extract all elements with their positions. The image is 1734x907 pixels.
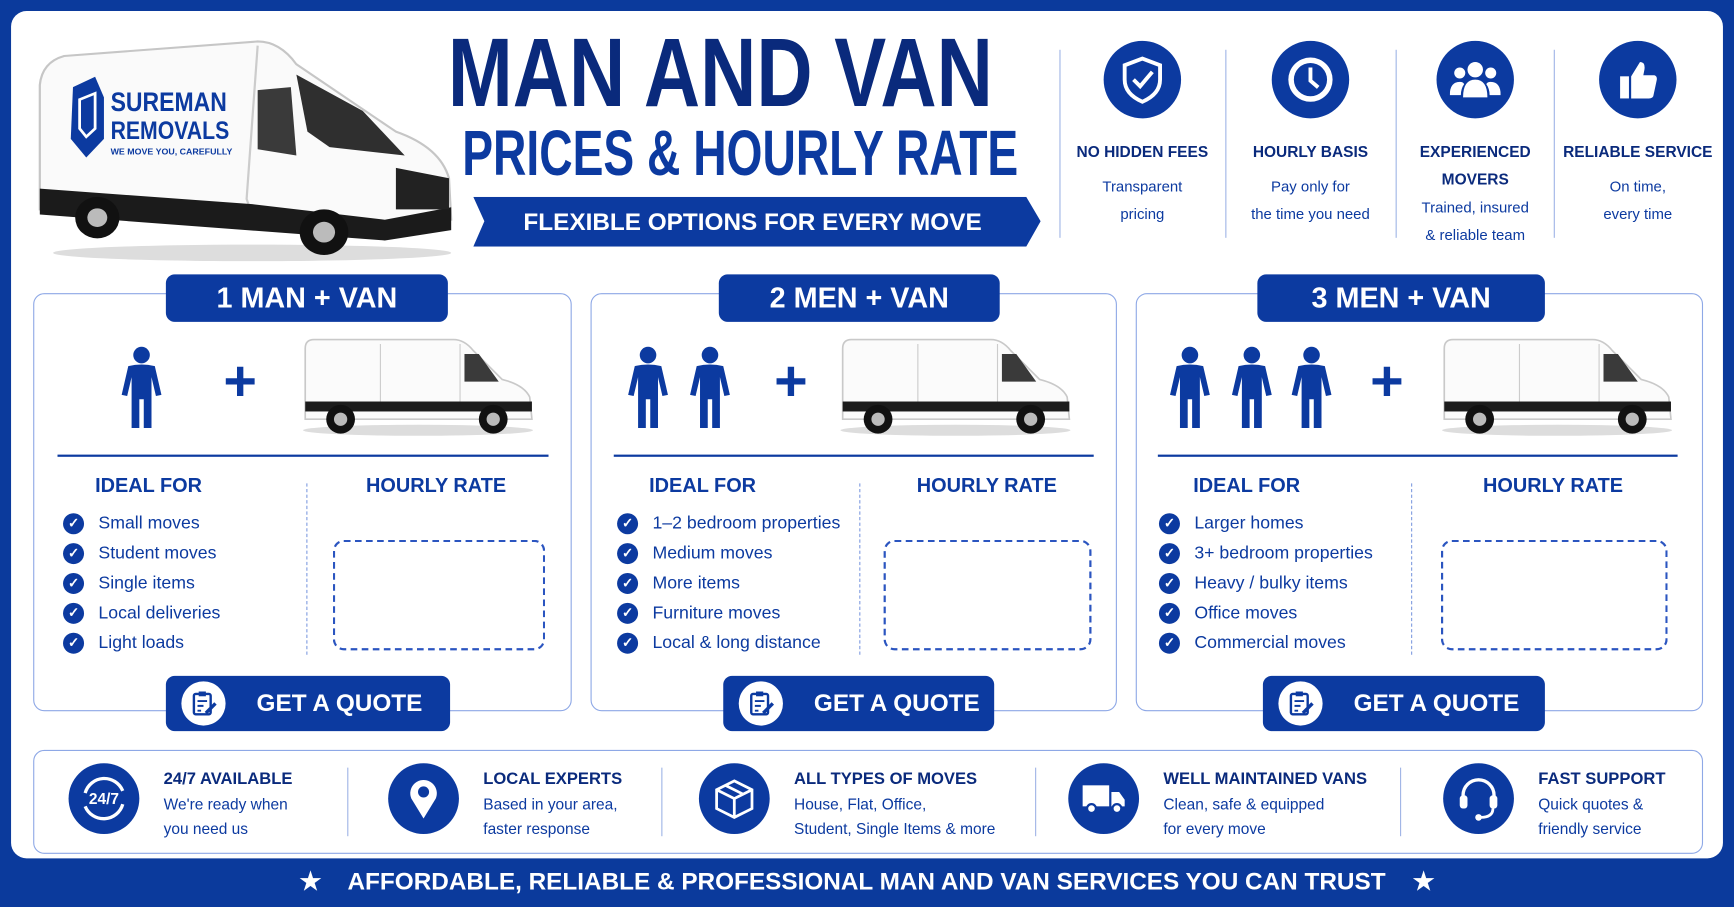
feature: no hidden fees: pricing (1120, 206, 1164, 222)
text: Larger homes (1194, 514, 1304, 533)
text: Small moves (98, 514, 200, 533)
hourly rate 1: HOURLY RATE (366, 475, 506, 497)
tab: 2 men + van (719, 274, 1000, 322)
benefit: local experts (388, 763, 622, 838)
ideal for 1: IDEAL FOR (95, 475, 202, 497)
feature: no hidden fees: Transparent (1102, 178, 1182, 195)
hourly rate 3: HOURLY RATE (1483, 475, 1623, 497)
feature: no hidden fees (1077, 40, 1208, 222)
icons row 1 (122, 338, 533, 436)
benefit: fast support (1443, 763, 1666, 838)
feature: experienced movers: & reliable team (1425, 227, 1525, 243)
tab: 3 men + van: 3 MEN + VAN (1312, 281, 1491, 314)
quote button 3: GET A QUOTE (1354, 689, 1519, 717)
text: Student, Single Items & more (794, 820, 995, 837)
text: Furniture moves (652, 604, 780, 623)
subtitle: PRICES & HOURLY RATE (462, 117, 1018, 189)
tab: 1 man + van (166, 274, 448, 322)
bottom benefits strip (33, 750, 1703, 854)
text: Local deliveries (98, 604, 220, 623)
benefit: 24/7 (68, 763, 292, 838)
text: Based in your area, (483, 795, 618, 813)
text: for every move (1163, 820, 1266, 837)
text: ALL TYPES OF MOVES (794, 770, 977, 789)
feature: hourly basis (1251, 40, 1370, 222)
quote button 1: GET A QUOTE (257, 689, 422, 717)
hero van with logo: SUREMAN (111, 87, 227, 117)
text: LOCAL EXPERTS (483, 770, 622, 789)
icons row 3: + (1370, 350, 1404, 414)
text: Quick quotes & (1538, 795, 1643, 813)
feature: hourly basis: HOURLY BASIS (1253, 143, 1368, 160)
text: Heavy / bulky items (1194, 574, 1348, 593)
text: We're ready when (164, 795, 288, 813)
ideal for 3: IDEAL FOR (1193, 475, 1300, 497)
hero van with logo: REMOVALS (111, 116, 229, 144)
feature: reliable service: every time (1603, 206, 1672, 222)
panel 3 (1136, 293, 1703, 711)
text: Student moves (98, 544, 216, 563)
text: House, Flat, Office, (794, 795, 926, 813)
tab: 3 men + van (1257, 274, 1545, 322)
text: Single items (98, 574, 195, 593)
footer tagline: ★ AFFORDABLE, RELIABLE & PROFESSIONAL MAN AND VAN SERVICES YOU CAN TRUST ★ (300, 867, 1434, 895)
text: you need us (164, 820, 248, 837)
icons row 2 (628, 338, 1070, 436)
feature: reliable service (1563, 40, 1712, 222)
panel 2 (591, 293, 1117, 711)
feature: hourly basis: the time you need (1251, 206, 1370, 222)
feature: experienced movers: MOVERS (1442, 170, 1509, 188)
text: 3+ bedroom properties (1194, 544, 1373, 563)
text: faster response (483, 820, 590, 837)
icons row 1: + (223, 350, 257, 414)
text: WELL MAINTAINED VANS (1163, 770, 1367, 789)
text: 24/7 (89, 791, 119, 808)
text: friendly service (1538, 820, 1642, 837)
text: Office moves (1194, 604, 1297, 623)
benefit: vans (1068, 763, 1367, 838)
quote button 2 (723, 676, 994, 731)
text: Medium moves (652, 544, 772, 563)
feature: experienced movers: Trained, insured (1422, 199, 1529, 216)
text: More items (652, 574, 740, 593)
title: MAN AND VAN (448, 18, 993, 127)
quote button 1 (166, 676, 450, 731)
feature: no hidden fees: NO HIDDEN FEES (1077, 143, 1208, 160)
text: Local & long distance (652, 634, 821, 653)
feature: reliable service: On time, (1610, 178, 1666, 195)
text: Commercial moves (1194, 634, 1346, 653)
panel 1 (33, 293, 572, 711)
quote button 3 (1263, 676, 1545, 731)
hero van with logo (38, 40, 452, 261)
ideal for 2: IDEAL FOR (649, 475, 756, 497)
tab: 1 man + van: 1 MAN + VAN (216, 281, 397, 314)
text: 24/7 AVAILABLE (164, 770, 292, 789)
text: 1–2 bedroom properties (652, 514, 840, 533)
hero van with logo: WE MOVE YOU, CAREFULLY (111, 147, 233, 156)
ribbon: FLEXIBLE OPTIONS FOR EVERY MOVE (523, 208, 982, 236)
feature: reliable service: RELIABLE SERVICE (1563, 143, 1712, 160)
hourly rate 2: HOURLY RATE (917, 475, 1057, 497)
icons row 3 (1170, 338, 1672, 436)
benefit: all types (698, 763, 995, 838)
feature: hourly basis: Pay only for (1271, 178, 1350, 195)
tab: 2 men + van: 2 MEN + VAN (770, 281, 949, 314)
ribbon (474, 196, 1040, 247)
quote button 2: GET A QUOTE (814, 689, 980, 717)
feature: experienced movers (1420, 40, 1531, 243)
feature: experienced movers: EXPERIENCED (1420, 143, 1531, 160)
text: Light loads (98, 634, 184, 653)
text: FAST SUPPORT (1538, 770, 1665, 789)
text: Clean, safe & equipped (1163, 795, 1324, 813)
icons row 2: + (774, 350, 808, 414)
